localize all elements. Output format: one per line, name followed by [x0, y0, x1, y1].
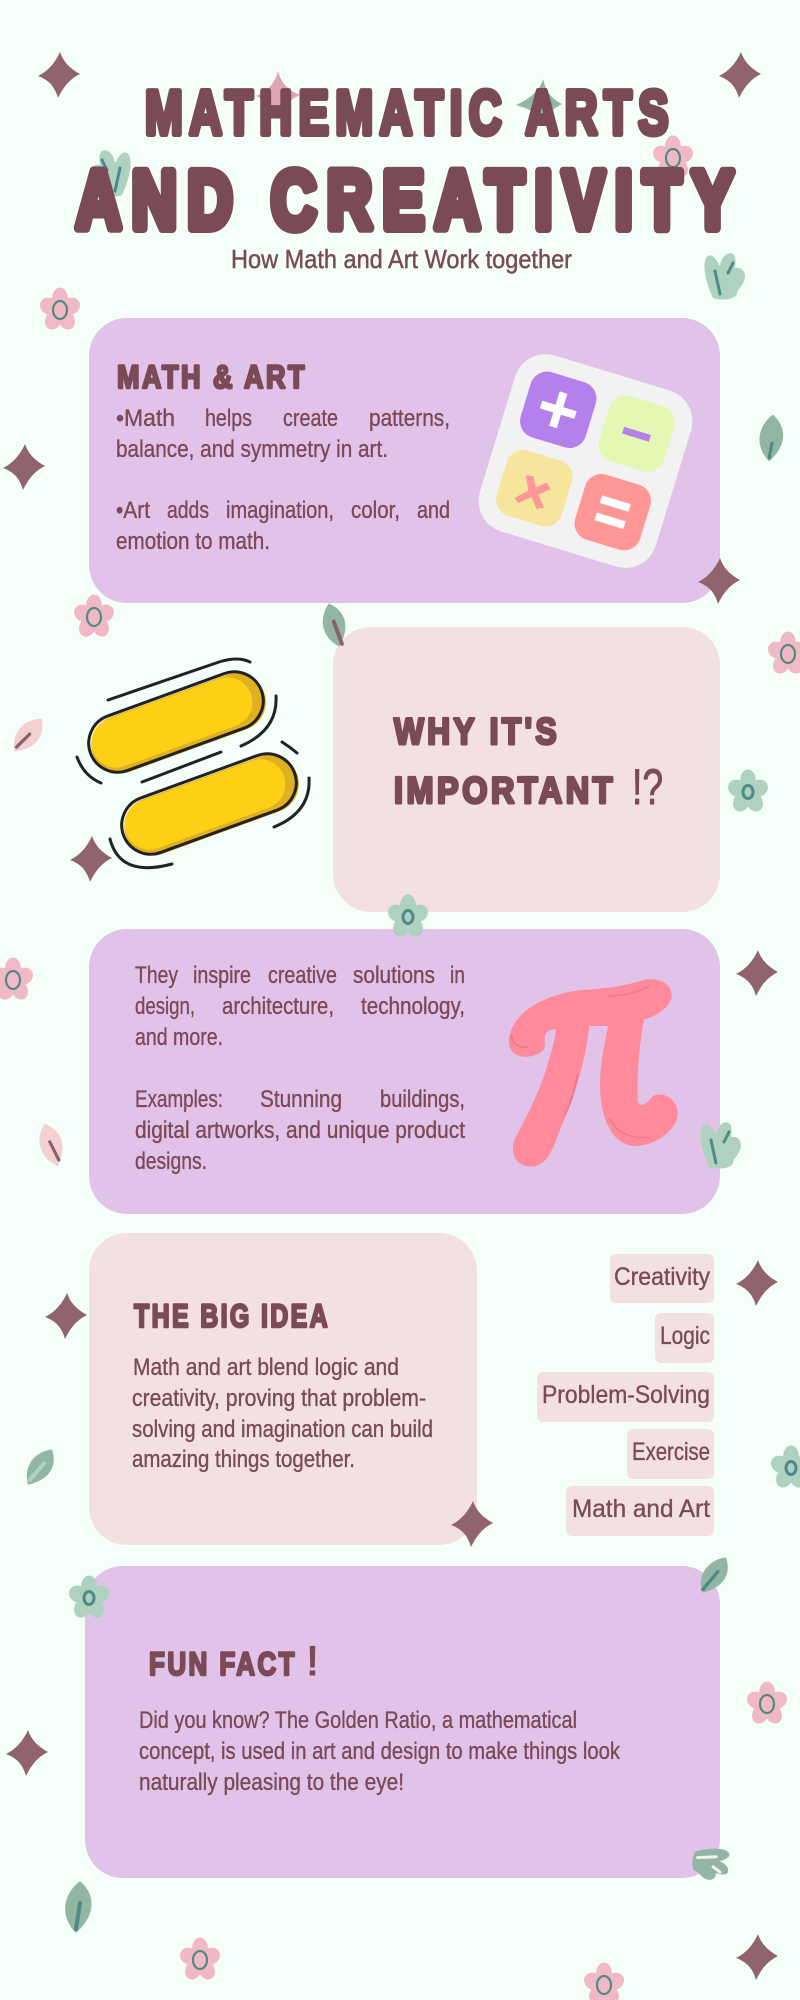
text: math bullet: •Math [116, 405, 175, 432]
text: creative solutions: design, [135, 993, 195, 1020]
tag: creativity [610, 1254, 714, 1303]
tag: math and art [566, 1486, 714, 1536]
text: art bullet: •Art [116, 497, 150, 524]
examples text [135, 962, 465, 1175]
icon: equals sign made of yellow pills [77, 659, 309, 868]
text: examples: Examples: [135, 1086, 223, 1113]
tag: logic [655, 1313, 714, 1363]
text: big idea body: creativity, proving that problem- [132, 1385, 426, 1412]
panel: fun fact background [85, 1566, 720, 1878]
heading: fun fact: FUN FACT [149, 1646, 297, 1682]
text: creative solutions: in [450, 962, 465, 989]
text: art bullet: emotion to math. [116, 528, 270, 555]
text: creative solutions: inspire [193, 962, 251, 989]
text: math bullet: helps [205, 405, 252, 432]
icon: pi symbol [509, 979, 678, 1167]
tag list [537, 1254, 714, 1536]
text: creative solutions: They [135, 962, 178, 989]
text: art bullet: color, [351, 497, 400, 524]
text: art bullet: imagination, [226, 497, 334, 524]
text: examples: digital artworks, and unique product [135, 1117, 465, 1144]
heading: why it's important: IMPORTANT [394, 770, 616, 811]
tag: exercise [627, 1429, 714, 1479]
text: creative solutions: and more. [135, 1024, 223, 1051]
text: fun fact body: concept, is used in art and design to make things look [139, 1738, 621, 1765]
tag: logic: Logic [660, 1322, 710, 1350]
text: creative solutions: technology, [361, 993, 465, 1020]
panel: why it's important background [333, 627, 720, 912]
motion lines [77, 659, 309, 868]
text: examples: buildings, [380, 1086, 465, 1113]
text: examples: Stunning [260, 1086, 342, 1113]
text: big idea body: solving and imagination can build [132, 1416, 433, 1443]
panel: math and art background [89, 318, 720, 603]
heading: the big idea: THE BIG IDEA [134, 1298, 330, 1334]
upper pill [81, 663, 274, 782]
panel: the big idea background [89, 1233, 477, 1545]
heading: math and art: MATH & ART [117, 359, 307, 395]
text: math bullet: create [283, 405, 338, 432]
text: big idea body: Math and art blend logic and [133, 1354, 399, 1381]
title [76, 79, 744, 246]
text: fun fact body: naturally pleasing to the eye! [139, 1769, 404, 1796]
heading: why it's important [394, 711, 663, 815]
tag: problem-solving: Problem-Solving [542, 1381, 710, 1409]
text: creative solutions: creative [268, 962, 337, 989]
lower pill [114, 745, 307, 864]
icon: calculator [471, 346, 700, 576]
text: math bullet: balance, and symmetry in art. [116, 436, 388, 463]
text: creative solutions: solutions [353, 962, 435, 989]
tag: math and art: Math and Art [572, 1495, 710, 1523]
heading: why it's important: !? [632, 759, 663, 815]
heading: why it's important: WHY IT'S [394, 711, 560, 752]
panel: examples background [89, 929, 720, 1214]
text: art bullet: and [417, 497, 450, 524]
tag: problem-solving [537, 1372, 714, 1422]
subtitle: How Math and Art Work together [231, 244, 572, 274]
math and art content [116, 359, 450, 555]
text: art bullet: adds [167, 497, 209, 524]
fun fact content [139, 1637, 621, 1796]
text: fun fact body: Did you know? The Golden Ratio, a mathematical [139, 1707, 577, 1734]
the big idea content [132, 1298, 433, 1473]
tag: creativity: Creativity [614, 1263, 710, 1291]
text: creative solutions: architecture, [222, 993, 334, 1020]
tag: exercise: Exercise [632, 1438, 710, 1466]
text: examples: designs. [135, 1148, 207, 1175]
text: big idea body: amazing things together. [132, 1446, 355, 1473]
heading: fun fact: ! [306, 1637, 319, 1684]
text: math bullet: patterns, [369, 405, 450, 432]
